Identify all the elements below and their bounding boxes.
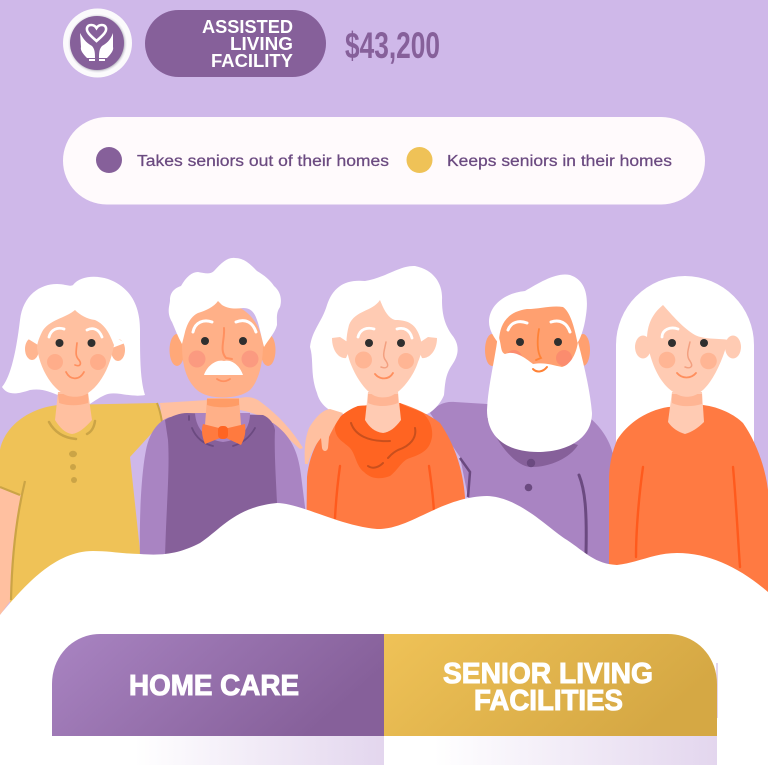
table row: home care cell [52, 736, 384, 765]
table row: senior living cell [384, 736, 717, 765]
icon: hands holding heart [63, 8, 132, 78]
legend [63, 117, 705, 204]
table header: senior living facilities: FACILITIES [474, 685, 623, 717]
pill: assisted living facility: FACILITY [211, 50, 294, 71]
price: $43,200 [345, 25, 440, 66]
legend: Takes seniors out of their homes [137, 153, 389, 170]
pill: assisted living facility: ASSISTED [202, 16, 293, 37]
table header: senior living facilities: SENIOR LIVING [443, 658, 653, 690]
figure: woman with long hair [609, 276, 768, 600]
pill: assisted living facility [145, 10, 326, 77]
pill: assisted living facility: LIVING [230, 33, 293, 54]
figure: man with bow tie [140, 258, 306, 560]
figure: woman in orange scarf [305, 266, 466, 560]
figure: woman in yellow shirt [0, 277, 303, 615]
table header backing strip [716, 663, 718, 718]
table header: senior living facilities [384, 634, 717, 736]
figure: man with beard [430, 274, 614, 570]
legend: Keeps seniors in their homes [447, 153, 672, 170]
table header: home care [52, 634, 384, 736]
table header: home care: HOME CARE [129, 670, 299, 702]
white wave panel [0, 496, 768, 765]
